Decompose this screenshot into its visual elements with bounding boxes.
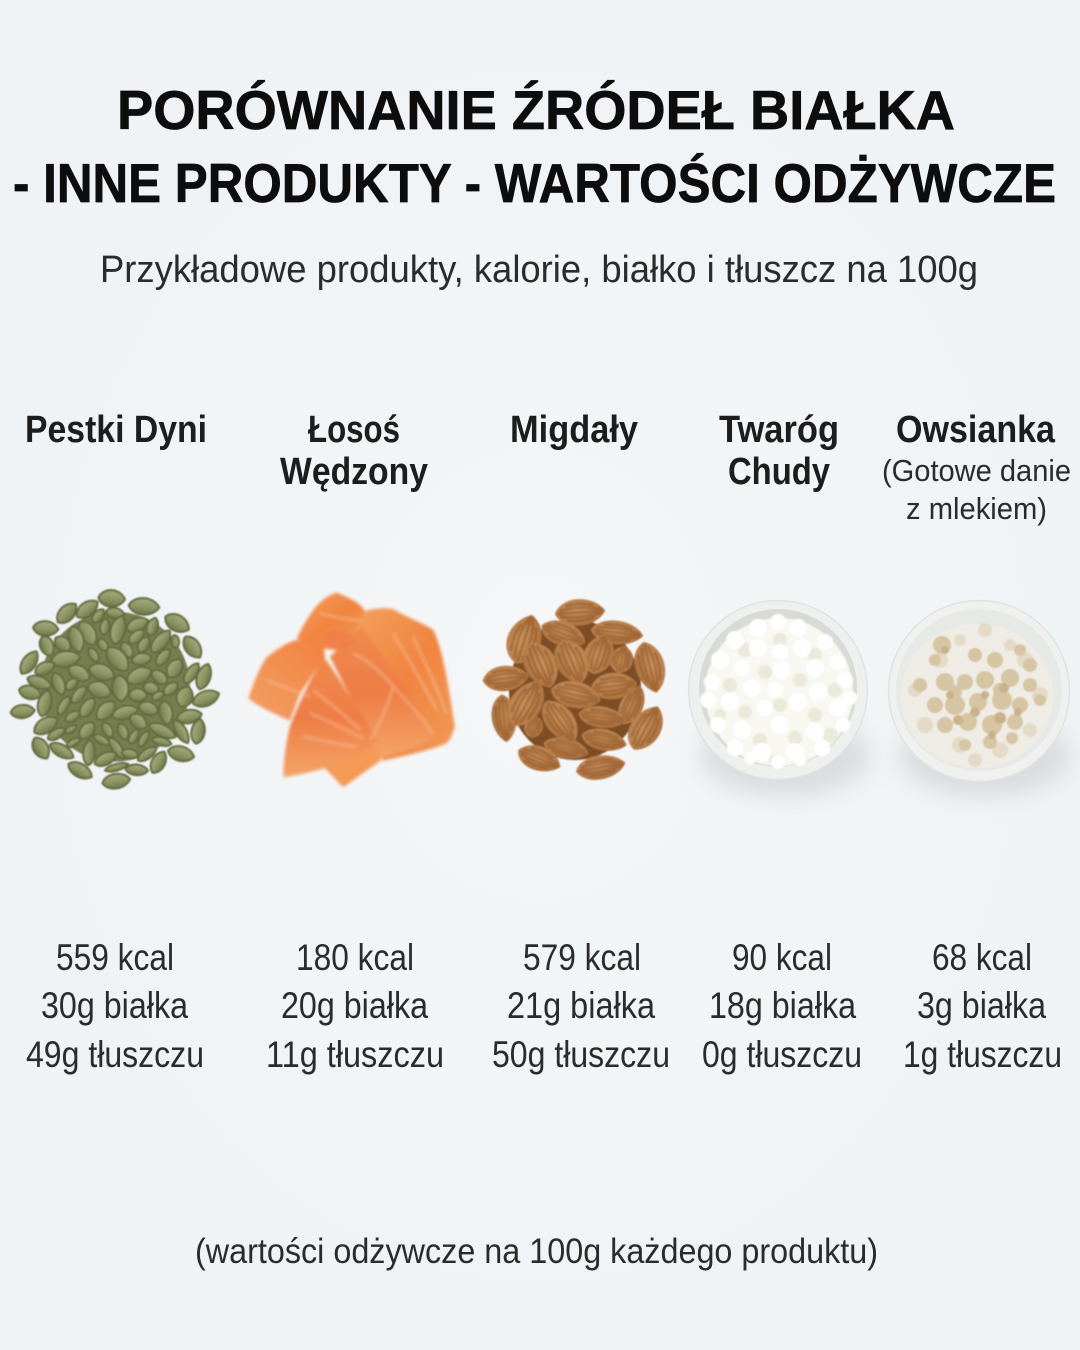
product name: Migdały: Migdały [510, 409, 638, 451]
nutrition values: Łosoś Wędzony: 180 kcal [296, 937, 414, 978]
product name: Twaróg Chudy: Chudy [728, 451, 830, 493]
image: cottage cheese bowl [688, 600, 870, 796]
product name: Łosoś Wędzony: Wędzony [280, 451, 428, 493]
nutrition values: Migdały: 579 kcal [523, 937, 641, 978]
nutrition values: Pestki Dyni: 30g białka [41, 985, 188, 1026]
nutrition values: Migdały: 50g tłuszczu [492, 1034, 670, 1075]
nutrition values: Pestki Dyni: 49g tłuszczu [26, 1034, 204, 1075]
nutrition values: Twaróg Chudy: 0g tłuszczu [702, 1034, 862, 1075]
nutrition values: Łosoś Wędzony: 11g tłuszczu [266, 1034, 444, 1075]
nutrition values: Twaróg Chudy [702, 937, 862, 1075]
product name: Owsianka [882, 409, 1071, 526]
title [13, 79, 1056, 214]
nutrition values: Twaróg Chudy: 18g białka [709, 985, 856, 1026]
subtitle: Przykładowe produkty, kalorie, białko i tłuszcz na 100g [100, 249, 978, 291]
image: almonds [481, 597, 672, 784]
nutrition values: Pestki Dyni: 559 kcal [56, 937, 174, 978]
product name: Twaróg Chudy [719, 409, 839, 493]
nutrition values: Migdały: 21g białka [507, 985, 655, 1026]
image: oatmeal bowl [888, 600, 1070, 796]
product name: Twaróg Chudy: Twaróg [719, 409, 839, 451]
footnote: (wartości odżywcze na 100g każdego produktu) [195, 1232, 878, 1271]
image: pumpkin seeds [10, 589, 222, 790]
nutrition values: Twaróg Chudy: 90 kcal [732, 937, 832, 978]
title: PORÓWNANIE ŹRÓDEŁ BIAŁKA [117, 79, 955, 141]
nutrition values: Migdały [492, 937, 670, 1075]
product name: Owsianka: z mlekiem) [906, 491, 1047, 526]
product name: Pestki Dyni: Pestki Dyni [25, 409, 207, 451]
nutrition values: Łosoś Wędzony: 20g białka [281, 985, 428, 1026]
product name: Owsianka: (Gotowe danie [882, 453, 1071, 488]
product name: Łosoś Wędzony: Łosoś [308, 409, 400, 451]
product name: Łosoś Wędzony [280, 409, 428, 493]
product name: Owsianka: Owsianka [896, 409, 1056, 451]
nutrition values: Owsianka: 68 kcal [932, 937, 1032, 978]
image: smoked salmon [248, 593, 455, 787]
nutrition values: Łosoś Wędzony [266, 937, 444, 1075]
nutrition values: Pestki Dyni [26, 937, 204, 1075]
nutrition values: Owsianka [903, 937, 1062, 1075]
nutrition values: Owsianka: 3g białka [917, 985, 1046, 1026]
